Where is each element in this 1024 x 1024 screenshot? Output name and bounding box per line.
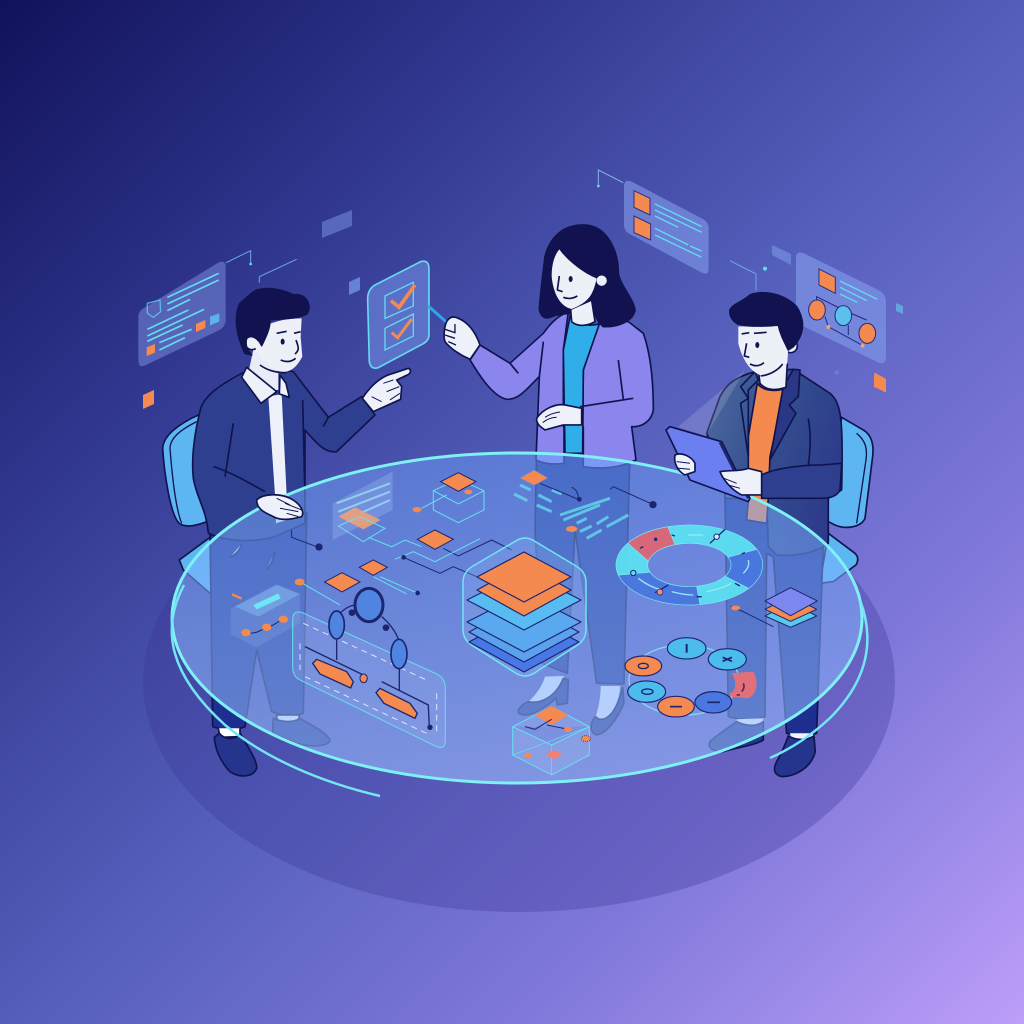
control dial buttons [625, 638, 757, 717]
top diamond and data dashes [514, 470, 657, 538]
table disc [172, 453, 862, 783]
outer arc: right [770, 600, 867, 758]
tablet and hands [666, 427, 762, 502]
small floating tiles [143, 210, 903, 409]
glass cube with nodes [231, 584, 300, 647]
layered stack [463, 538, 586, 676]
chair: left [163, 415, 217, 593]
pointing hand, left man [362, 368, 410, 412]
stack layers [467, 552, 581, 672]
table items, right side [513, 470, 817, 775]
resting hand, left man [257, 495, 303, 519]
checklist card [368, 261, 429, 368]
floor shadow [143, 452, 895, 912]
segmented ring [616, 525, 763, 605]
flow diamonds [292, 470, 548, 605]
bottom wire cube [513, 706, 591, 775]
holographic table [172, 453, 862, 783]
woman upper body [470, 225, 653, 468]
org chart card [293, 588, 445, 747]
chair: right [820, 417, 873, 583]
left man torso [193, 289, 375, 541]
person: woman [470, 225, 653, 735]
mini stack [731, 588, 817, 627]
tilted glass note [333, 472, 422, 547]
person: left man [193, 289, 375, 776]
woman legs [518, 450, 630, 735]
floating panel: document left [138, 251, 297, 366]
right man legs [709, 493, 825, 777]
table rim [172, 453, 862, 783]
floating panel: top right notes [597, 170, 709, 274]
left man legs [210, 507, 330, 776]
table items, left side [231, 470, 548, 747]
stack hex glass [463, 538, 586, 676]
wire cube with diamond [413, 473, 484, 523]
person: right man [707, 293, 842, 777]
floating panel: right flow diagram [730, 252, 886, 393]
tablet beam [678, 370, 745, 436]
outer arc: left [172, 585, 380, 796]
right man jacket [707, 369, 842, 555]
hand and stylus, woman [428, 306, 480, 359]
